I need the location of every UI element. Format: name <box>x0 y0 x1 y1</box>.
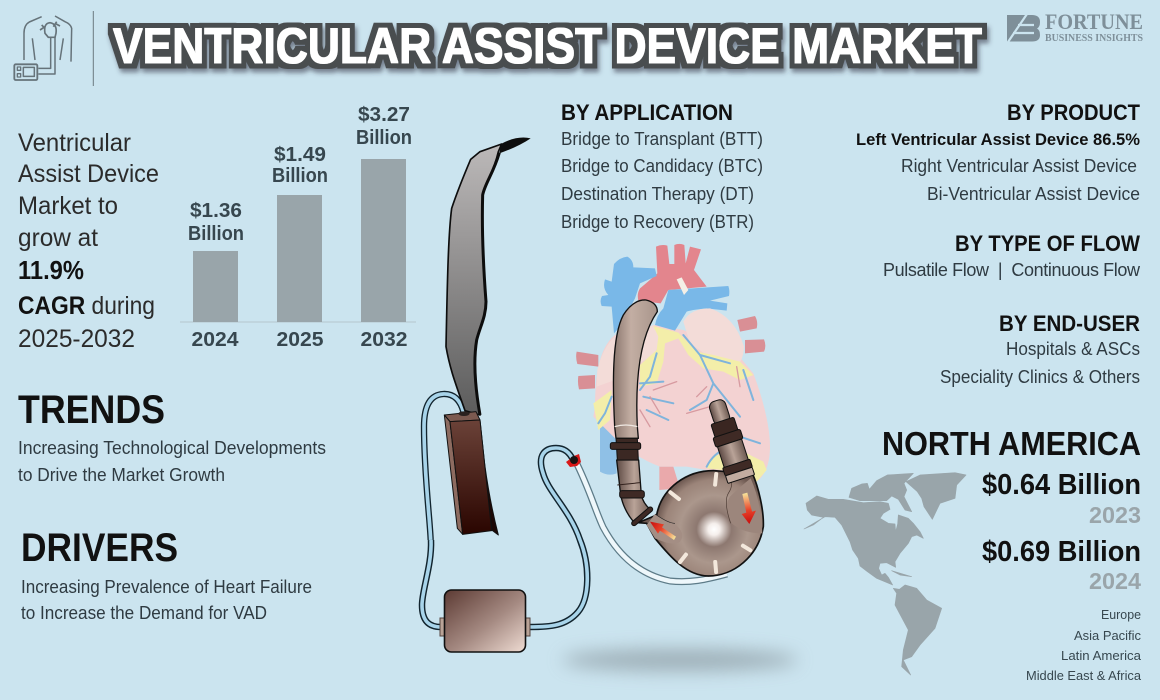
flow list: Pulsatile Flow | Continuous Flow <box>883 260 1141 280</box>
inflow cannula <box>613 300 657 438</box>
value 2024: $0.69 Billion <box>982 536 1141 568</box>
illustration: implanted pump <box>610 300 763 576</box>
pump vanes <box>668 472 753 574</box>
application list: Bridge to Candidacy (BTC) <box>561 156 763 176</box>
drivers text: to Increase the Demand for VAD <box>21 603 267 623</box>
bar 2032 <box>356 104 412 351</box>
application list: Bridge to Transplant (BTT) <box>561 129 763 149</box>
trends text: Increasing Technological Developments <box>18 438 326 458</box>
value 2024 <box>982 536 1141 594</box>
flow arrow: inflow <box>650 522 676 540</box>
other regions: Asia Pacific <box>1074 628 1141 643</box>
trends text: to Drive the Market Growth <box>18 465 225 485</box>
logo: Fortune Business Insights <box>1007 9 1143 44</box>
end-user heading: BY END-USER <box>999 311 1140 336</box>
drivers text <box>21 577 312 623</box>
trends panel <box>18 388 326 485</box>
bar 2025: Billion <box>272 165 328 187</box>
bar 2025: 2025 <box>276 329 324 351</box>
end-user list: Hospitals & ASCs <box>1006 339 1140 359</box>
bar 2024: 2024 <box>192 329 239 351</box>
battery box <box>444 412 498 535</box>
other regions: Europe <box>1101 607 1141 622</box>
product list: Right Ventricular Assist Device <box>901 156 1137 176</box>
text block: market growth summary: grow at <box>18 224 98 252</box>
region heading: NORTH AMERICA <box>882 425 1141 462</box>
illustration: controller wire to pump <box>422 448 727 627</box>
other regions: Latin America <box>1061 648 1142 663</box>
bar 2025: $1.49 <box>274 144 326 166</box>
text block: market growth summary: Ventricular <box>18 129 131 157</box>
end-user list: Speciality Clinics & Others <box>940 367 1140 387</box>
text block: market growth summary: CAGR during <box>18 292 155 320</box>
bar 2032: Billion <box>356 127 412 149</box>
white driveline <box>575 460 727 582</box>
product list <box>856 130 1140 204</box>
logo: Fortune Business Insights: BUSINESS INSIGHTS <box>1045 33 1143 44</box>
bar 2024 <box>188 200 244 351</box>
icon: red wire connector <box>566 454 581 467</box>
lower elbow <box>617 460 652 523</box>
application list <box>561 129 763 232</box>
lower left wire <box>422 540 441 627</box>
value 2024: 2024 <box>1089 568 1141 594</box>
bar 2032: $3.27 <box>358 104 410 126</box>
flow arrow: outflow <box>742 493 756 524</box>
value 2023: $0.64 Billion <box>982 469 1141 501</box>
by product panel <box>856 100 1141 204</box>
text block: market growth summary: Market to <box>18 192 118 220</box>
other regions: Middle East & Africa <box>1026 668 1142 683</box>
bar 2025 <box>272 144 328 351</box>
title: VENTRICULAR ASSIST DEVICE MARKET <box>113 18 982 74</box>
product list: Bi-Ventricular Assist Device <box>927 184 1140 204</box>
flow heading: BY TYPE OF FLOW <box>955 231 1140 256</box>
left wire <box>424 394 463 540</box>
product heading: BY PRODUCT <box>1007 100 1141 125</box>
drivers text: Increasing Prevalence of Heart Failure <box>21 577 312 597</box>
logo mark <box>1007 14 1040 42</box>
north america panel <box>882 425 1142 683</box>
application heading: BY APPLICATION <box>561 100 733 125</box>
by type of flow panel <box>883 231 1141 280</box>
text block: market growth summary: Assist Device <box>18 160 159 188</box>
map: Americas <box>804 473 966 675</box>
value 2023 <box>982 469 1141 528</box>
by end-user panel <box>940 311 1140 387</box>
product list: Left Ventricular Assist Device 86.5% <box>856 130 1140 149</box>
bar 2032: 2032 <box>360 329 408 351</box>
bar chart: market size <box>180 104 416 351</box>
application list: Destination Therapy (DT) <box>561 184 754 204</box>
illustration: heart <box>576 244 770 490</box>
bar 2024: $1.36 <box>190 200 242 222</box>
application list: Bridge to Recovery (BTR) <box>561 212 754 232</box>
illustration: external controller <box>440 590 530 652</box>
blue controller wire <box>530 448 587 627</box>
bar 2024: Billion <box>188 223 244 245</box>
outflow graft <box>702 396 755 484</box>
by application panel <box>561 100 763 232</box>
ground shadow <box>562 649 798 671</box>
illustration: wearable belt with battery box <box>424 138 531 540</box>
text block: market growth summary: 11.9% <box>18 255 84 285</box>
pump housing <box>638 471 763 576</box>
icon: patient with heart pump <box>14 16 72 80</box>
text block: market growth summary <box>18 129 159 353</box>
pump ring <box>634 509 650 523</box>
logo wordmark: FORTUNE <box>1045 9 1143 34</box>
text block: market growth summary: 2025-2032 <box>18 325 135 353</box>
value 2023: 2023 <box>1089 502 1141 528</box>
other regions <box>1026 607 1142 683</box>
end-user list <box>940 339 1140 387</box>
drivers heading: DRIVERS <box>21 526 178 570</box>
belt strap <box>446 144 502 415</box>
header divider <box>93 11 94 86</box>
trends text <box>18 438 326 485</box>
drivers panel <box>21 526 312 623</box>
trends heading: TRENDS <box>18 388 165 432</box>
